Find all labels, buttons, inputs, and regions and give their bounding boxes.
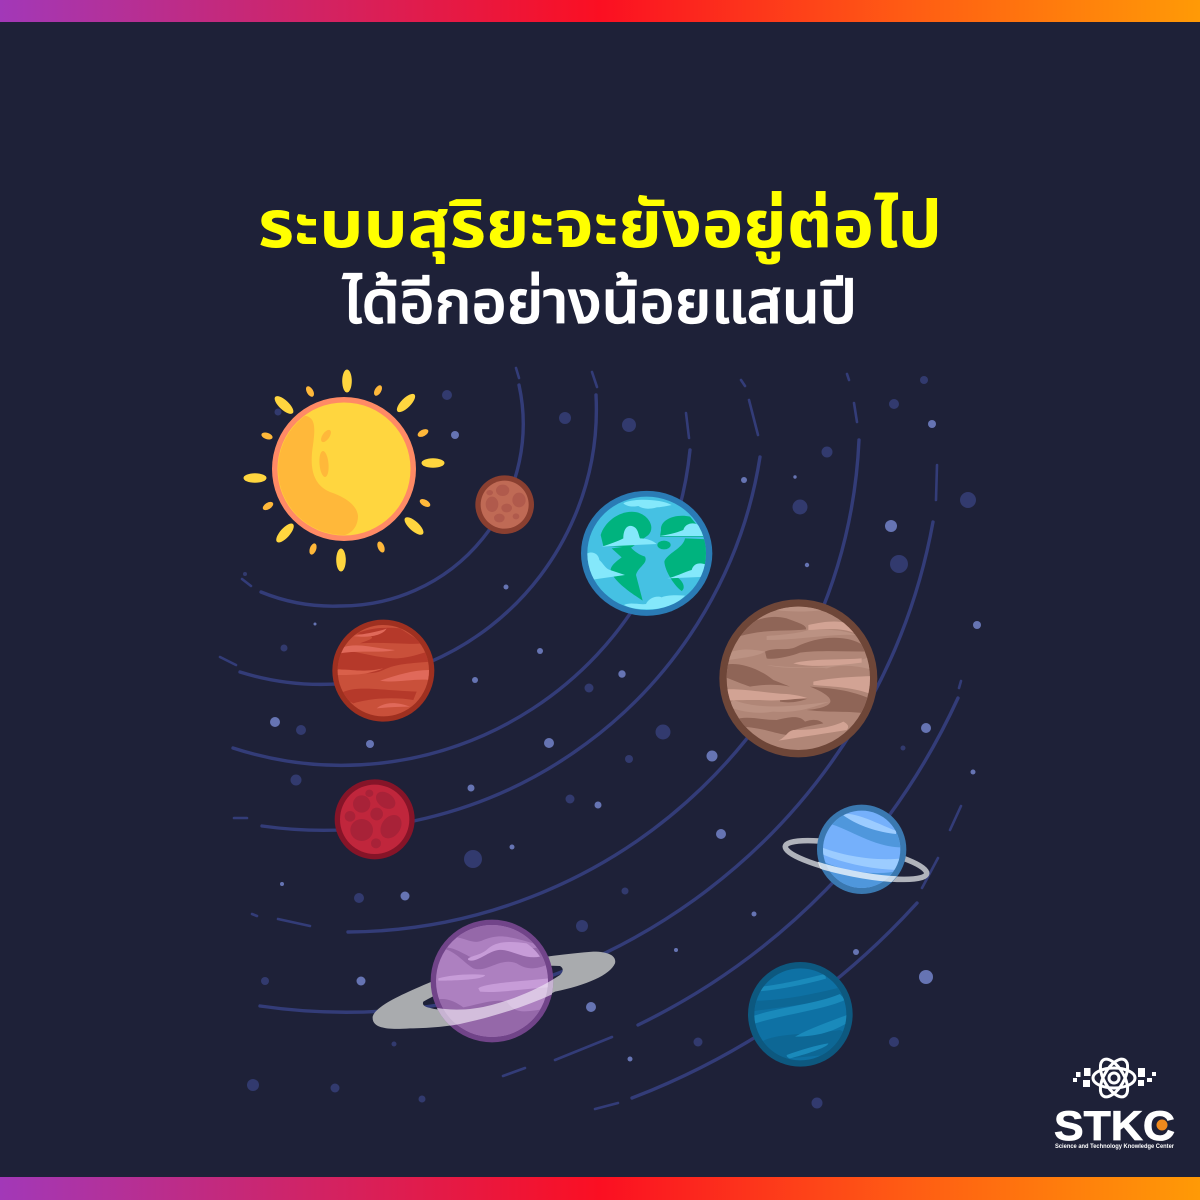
stars — [243, 376, 981, 1108]
bottom gradient bar — [0, 1177, 1200, 1200]
title — [258, 187, 942, 336]
planet: mercury — [475, 475, 534, 534]
planet: crimson cratered — [335, 779, 415, 859]
tagline: Science and Technology Knowledge Center — [1055, 1144, 1175, 1150]
planet: ringed blue — [783, 805, 929, 894]
clouds — [583, 500, 707, 609]
front ring — [818, 862, 897, 882]
blue globe — [817, 805, 906, 894]
continents — [601, 512, 707, 601]
back ring — [373, 952, 615, 1029]
planet: ringed purple — [373, 920, 615, 1042]
title line 1: ระบบสุริยะจะยังอยู่ต่อไป — [258, 187, 942, 264]
logo: STKC — [1054, 1055, 1175, 1150]
icon: pixel squares — [1073, 1068, 1156, 1087]
front ring — [437, 979, 554, 1026]
wordmark: STKC — [1054, 1102, 1175, 1149]
icon: sun — [244, 370, 444, 572]
planet: earth — [581, 491, 712, 616]
orbit lines — [220, 368, 961, 1109]
planet: neptune — [748, 962, 853, 1067]
icon: atom — [1093, 1055, 1135, 1101]
back ring — [783, 833, 929, 887]
planet: orange-red banded — [332, 620, 434, 722]
title line 2: ได้อีกอย่างน้อยแสนปี — [342, 269, 857, 336]
top gradient bar — [0, 0, 1200, 22]
planet: brown banded — [719, 599, 877, 757]
orange dot — [1156, 1120, 1168, 1130]
purple globe — [430, 920, 553, 1042]
